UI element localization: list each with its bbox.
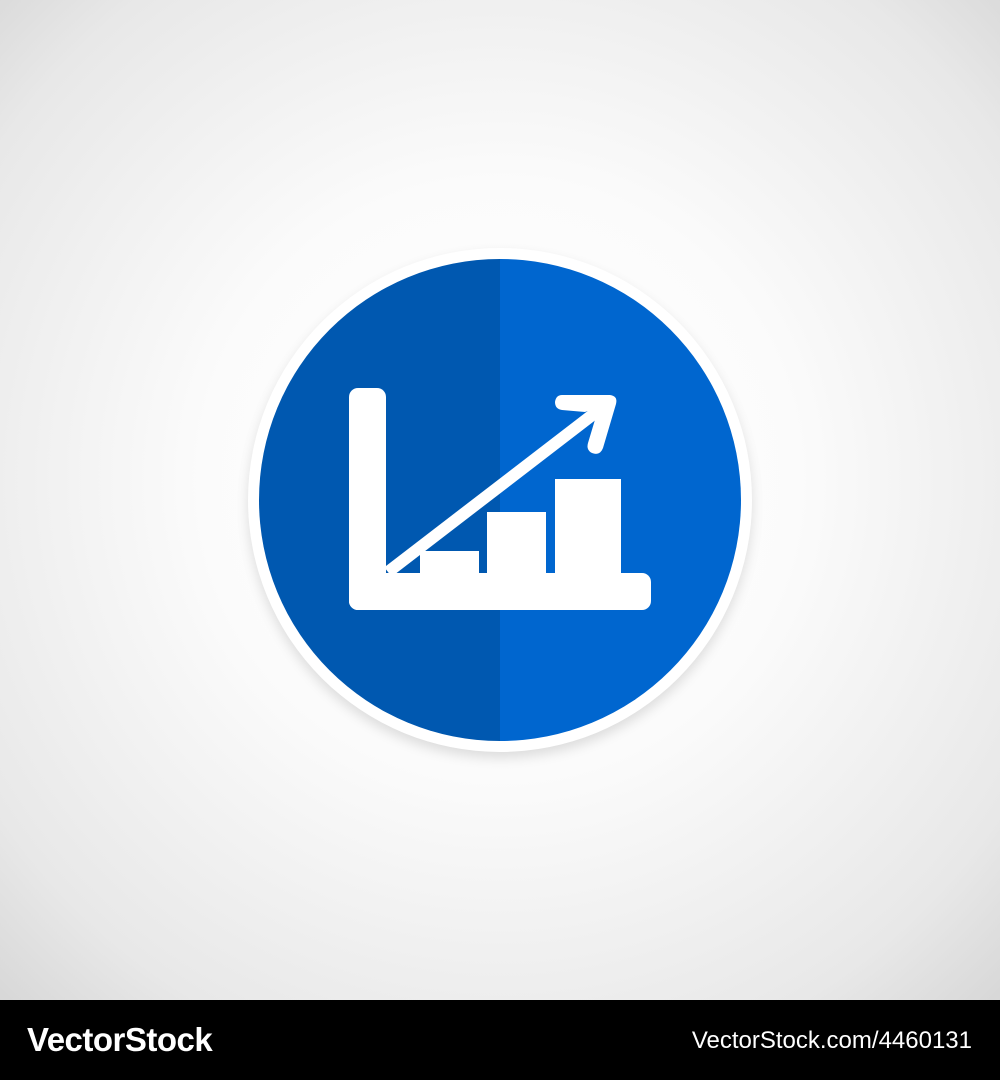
chart glyph [349, 388, 651, 610]
image id url: VectorStock.com/4460131 [692, 1027, 972, 1054]
logo text: VectorStock [27, 1021, 212, 1058]
footer bar [0, 1000, 1000, 1080]
icon: blue circle with growth chart [244, 259, 756, 762]
